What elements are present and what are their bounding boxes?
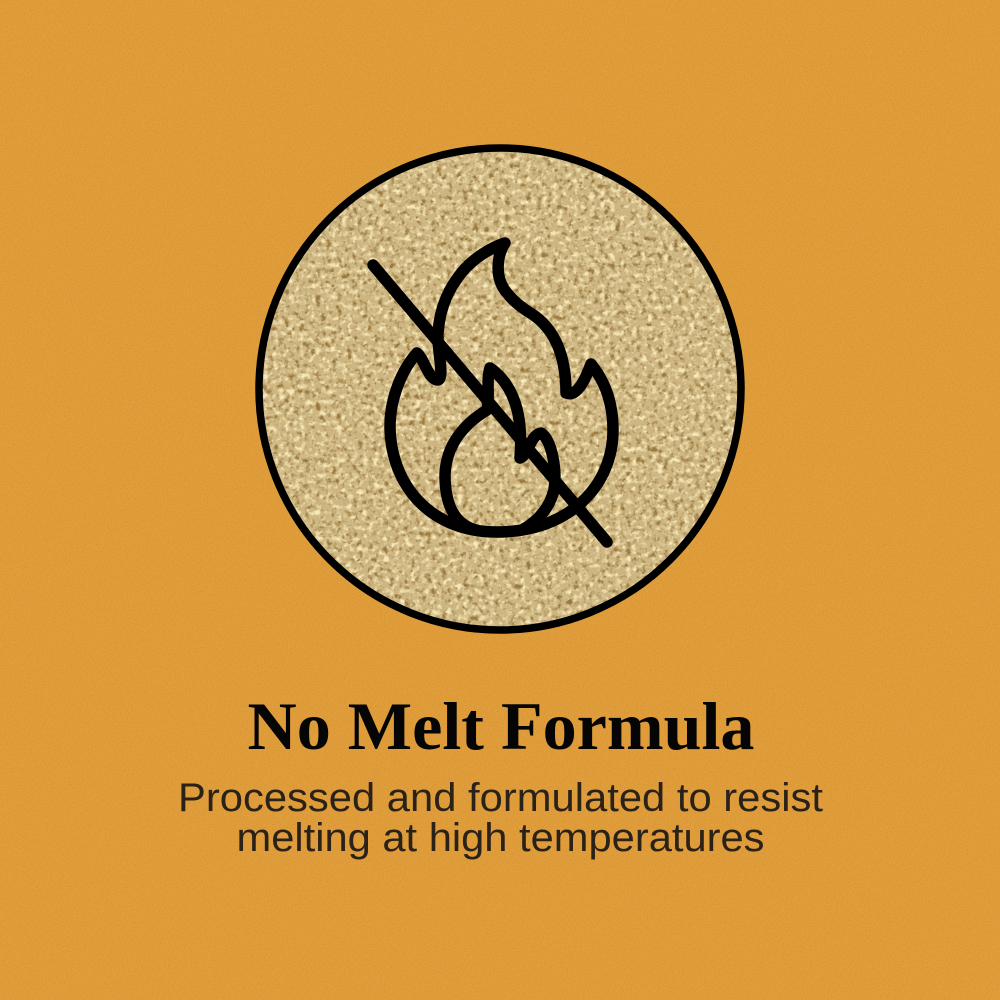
flame outer outline [390, 243, 613, 532]
circle outline [259, 148, 741, 630]
slash line [373, 265, 607, 542]
panel: textured grain circle [255, 144, 745, 634]
text block: description [178, 776, 823, 860]
flame inner outline [445, 368, 555, 530]
heading: No Melt Formula [248, 688, 754, 764]
description line 2: melting at high temperatures [236, 816, 764, 860]
grain texture fill [255, 144, 745, 634]
description line 1: Processed and formulated to resist [178, 776, 823, 820]
icon: crossed-out flame [373, 243, 613, 542]
